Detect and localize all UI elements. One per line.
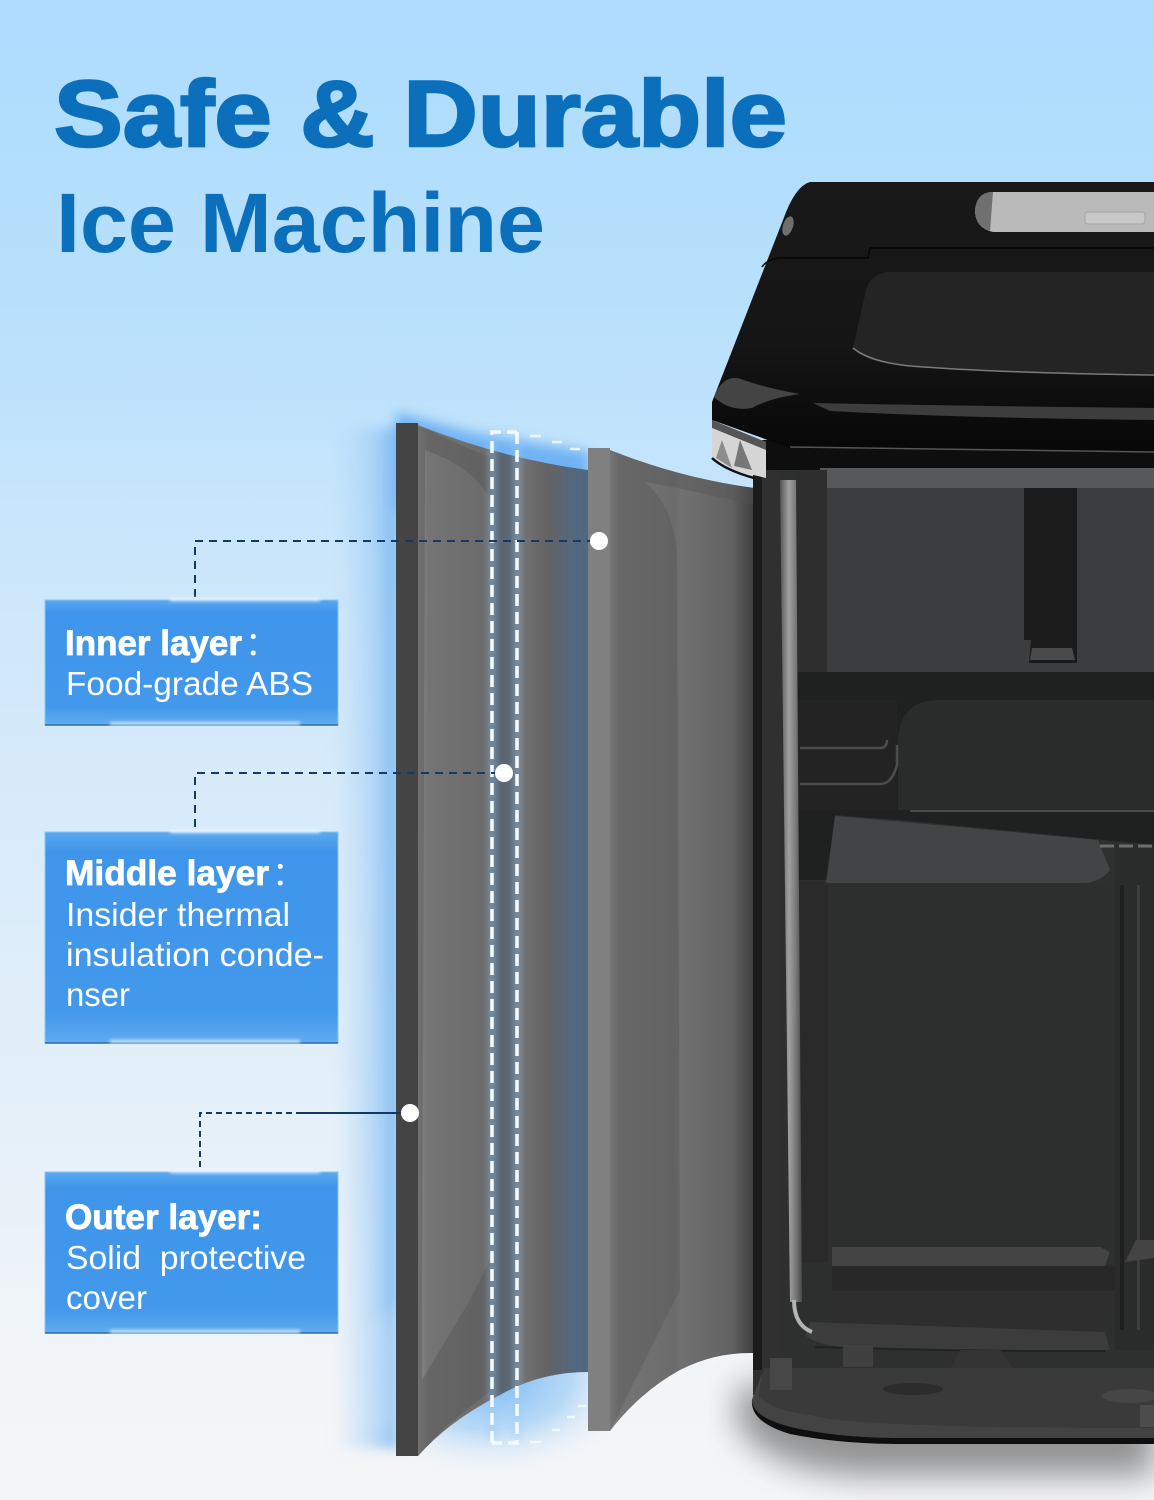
callout: inner layer <box>45 598 338 725</box>
chrome edge <box>780 480 802 1302</box>
dark band <box>797 672 1154 880</box>
title: Ice Machine <box>56 176 545 270</box>
basket <box>797 882 1115 1345</box>
lid window <box>853 272 1154 374</box>
callout: middle layer <box>45 830 338 1043</box>
ice machine <box>712 182 1154 1444</box>
callout: outer layer: Solid protective <box>66 1239 306 1276</box>
outer layer curved shell <box>418 425 588 1456</box>
ice chute <box>1024 488 1077 663</box>
connector: middle layer <box>195 764 513 827</box>
callout: inner layer: Inner layer <box>65 624 242 663</box>
ice tray <box>898 700 1154 812</box>
basket band <box>832 1247 1110 1266</box>
callout: outer layer <box>45 1170 338 1333</box>
callout: inner layer: ： <box>245 625 278 662</box>
callout: middle layer: ： <box>272 855 305 892</box>
chrome hinge <box>712 420 766 478</box>
lid highlights <box>714 378 800 409</box>
callout: middle layer: nser <box>66 976 130 1013</box>
outer layer edge <box>396 423 418 1456</box>
panel: inner layer <box>588 448 754 1431</box>
window strip <box>820 468 1154 488</box>
upper black band <box>753 440 1154 470</box>
middle layer dashed outline <box>492 432 586 1443</box>
handle <box>975 192 1154 232</box>
second basket <box>1115 845 1154 1350</box>
title: Safe & Durable <box>54 61 787 166</box>
title <box>54 61 787 270</box>
machine base <box>752 1378 1154 1444</box>
feet <box>843 1345 1015 1370</box>
callout: outer layer: Outer layer: <box>65 1198 262 1237</box>
callout: inner layer: Food-grade ABS <box>66 665 313 702</box>
upper compartment <box>827 488 1154 672</box>
callout: middle layer: Insider thermal <box>66 896 290 933</box>
inner layer curved shell <box>610 450 754 1431</box>
inner layer edge <box>588 448 610 1431</box>
tray bracket <box>800 740 897 784</box>
machine shadow <box>735 1385 1154 1476</box>
connector: outer layer <box>200 1104 419 1167</box>
callout: middle layer: Middle layer <box>65 854 269 893</box>
blue glow behind layers <box>335 412 640 1475</box>
callout: outer layer: cover <box>66 1279 147 1316</box>
panel: outer layer <box>396 423 588 1456</box>
lid upper seam <box>762 248 1154 267</box>
connector: inner layer <box>195 532 608 597</box>
machine lid <box>712 182 1154 452</box>
basket rim <box>805 1322 1110 1351</box>
machine body <box>753 440 1154 1395</box>
lid button <box>780 215 796 237</box>
callout: middle layer: insulation conde- <box>66 936 324 973</box>
